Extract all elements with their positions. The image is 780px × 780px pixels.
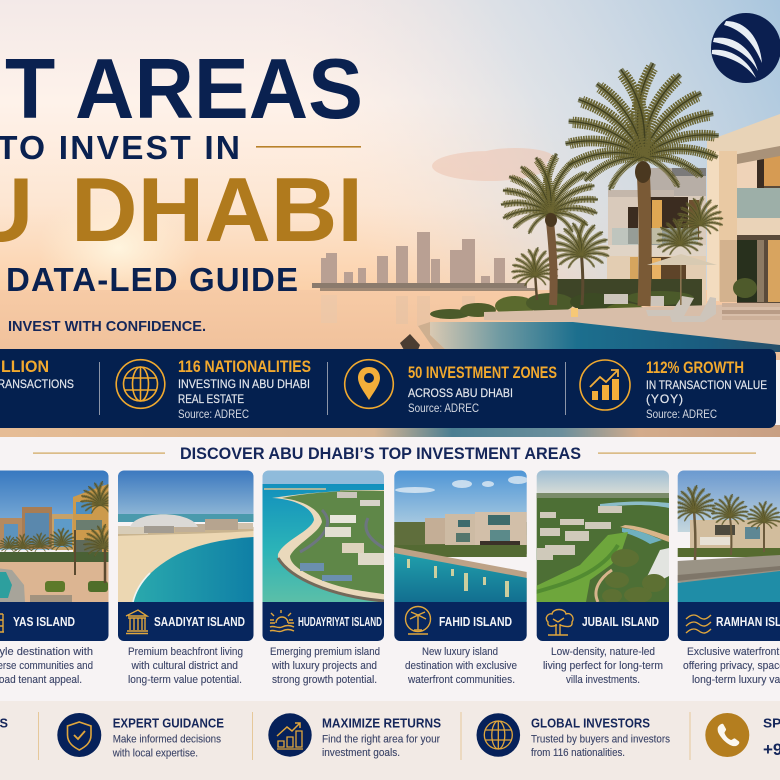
left villa (598, 168, 706, 306)
description: Fahid Island: New luxury island (422, 646, 498, 658)
description: Saadiyat Island: Premium beachfront living (128, 646, 243, 658)
item: expert guidance: Make informed decisions (113, 734, 221, 746)
medium palm (501, 153, 598, 305)
item: maximize returns: investment goals. (322, 747, 400, 759)
distant skyline (312, 232, 535, 326)
description: Ramhan Island (683, 646, 780, 686)
small palms (511, 196, 723, 305)
icon: growth chart (580, 360, 630, 410)
lantern (571, 308, 578, 317)
description: Saadiyat Island: with cultural district and (131, 660, 238, 672)
title line: dhabi: DHABI (71, 160, 363, 261)
panel: Hudayriyat Island (262, 470, 384, 686)
panel: Fahid Island (394, 470, 528, 686)
item: global investors: from 116 nationalities. (531, 747, 625, 759)
item: global investors: GLOBAL INVESTORS (531, 716, 650, 731)
tagline: INVEST WITH CONFIDENCE. (8, 318, 206, 335)
item: maximize returns (268, 713, 441, 759)
stat: nationalities: 116 NATIONALITIES (178, 358, 311, 376)
icon: globe (116, 360, 165, 408)
item: expert guidance (57, 713, 224, 760)
panel: Jubail Island (536, 470, 670, 686)
lounge chairs (604, 294, 716, 322)
description: Fahid Island: waterfront communities. (407, 674, 515, 686)
terrace deck and steps (484, 303, 780, 345)
sky (0, 0, 780, 303)
description: Fahid Island: destination with exclusive (405, 660, 517, 672)
stat: investment zones (408, 364, 557, 415)
item: expert guidance: EXPERT GUIDANCE (113, 716, 224, 731)
stat: growth: Source: ADREC (646, 409, 717, 421)
description: Jubail Island: villa investments. (566, 674, 640, 686)
title line: to invest in: TO INVEST IN (0, 130, 240, 167)
stat: nationalities: INVESTING IN ABU DHABI (178, 377, 310, 391)
icon: location pin (345, 360, 393, 408)
card photo and label: Jubail Island (536, 470, 670, 641)
stat: nationalities: Source: ADREC (178, 409, 249, 421)
strip of water below stats (0, 425, 780, 437)
card photo and label: Yas Island (0, 470, 108, 641)
description: Saadiyat Island (128, 646, 243, 686)
logo (711, 13, 780, 83)
panel: bottom benefits band (0, 701, 780, 780)
hero photo: sunset coast with villas and palms (0, 0, 780, 360)
panel: Ramhan Island (672, 470, 780, 686)
description: Jubail Island (543, 646, 663, 686)
white content background (0, 437, 780, 701)
section heading: DISCOVER ABU DHABI’S TOP INVESTMENT AREAS (180, 445, 581, 463)
description: Hudayriyat Island: strong growth potential. (272, 674, 377, 686)
stat: growth (646, 359, 767, 421)
stat: investment zones: 50 INVESTMENT ZONES (408, 364, 557, 382)
description: Fahid Island (405, 646, 517, 686)
item: maximize returns: Find the right area for your (322, 734, 440, 746)
card photo and label: Fahid Island (394, 470, 528, 641)
icon: museum temple (126, 610, 148, 634)
icon: waves (686, 615, 711, 633)
description: Hudayriyat Island: with luxury projects and (271, 660, 377, 672)
item: maximize returns: MAXIMIZE RETURNS (322, 716, 441, 731)
icon: palm in circle (406, 606, 430, 634)
stat: investment zones: Source: ADREC (408, 403, 479, 415)
right villa (707, 114, 780, 305)
card photo and label: Saadiyat Island (118, 470, 254, 641)
description: Yas Island (0, 646, 93, 686)
item: expert guidance: with local expertise. (112, 748, 198, 760)
tall palm (566, 63, 719, 306)
stat: nationalities: REAL ESTATE (178, 392, 244, 406)
label: Fahid Island: FAHID ISLAND (439, 615, 512, 629)
item: global investors: Trusted by buyers and investors (531, 734, 670, 746)
stat: nationalities (178, 358, 311, 421)
infinity pool (400, 322, 780, 352)
icon: sun over waves (270, 610, 294, 632)
stat: transactions (0, 357, 74, 391)
panel: Saadiyat Island (118, 470, 254, 686)
icon: tree (546, 610, 573, 635)
panel: key statistics band (0, 349, 776, 428)
label: Yas Island: YAS ISLAND (13, 615, 75, 629)
label: Hudayriyat Island: HUDAYRIYAT ISLAND (298, 615, 382, 629)
item: call to action (705, 713, 780, 759)
icon: Yas Island (0, 614, 4, 632)
title (0, 42, 363, 335)
description: Jubail Island: living perfect for long-term (543, 660, 663, 672)
sea (0, 290, 780, 360)
description: Hudayriyat Island (270, 646, 380, 686)
card photo and label: Ramhan Island (672, 470, 780, 641)
title line: best areas: T AREAS (5, 42, 363, 137)
description: Saadiyat Island: long-term value potential. (128, 674, 242, 686)
item: global investors (476, 713, 670, 759)
label: Saadiyat Island: SAADIYAT ISLAND (154, 615, 245, 629)
gold rule (256, 146, 361, 148)
description: Hudayriyat Island: Emerging premium island (270, 646, 380, 658)
card photo and label: Hudayriyat Island (262, 470, 384, 641)
description: Jubail Island: Low-density, nature-led (551, 646, 655, 658)
panel: Yas Island (0, 470, 108, 686)
stat: growth: 112% GROWTH (646, 359, 744, 377)
stat: growth: (YOY) (646, 392, 683, 406)
label: Jubail Island: JUBAIL ISLAND (582, 615, 659, 629)
stat: investment zones: ACROSS ABU DHABI (408, 386, 513, 400)
cloud (432, 148, 553, 181)
parasol (647, 254, 717, 305)
hedge and garden (430, 278, 757, 319)
